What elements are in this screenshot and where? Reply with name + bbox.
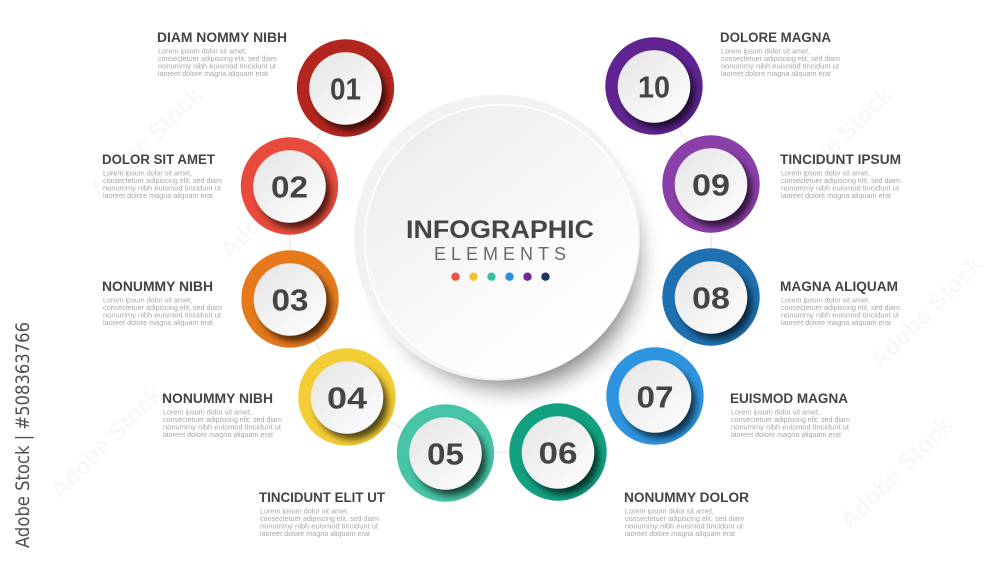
- label 05: nonummy nibh euismod tincidunt ut: [260, 522, 378, 530]
- label 01: DIAM NOMMY NIBH: [157, 30, 287, 45]
- label 03: Lorem ipsum dolor sit amet,: [103, 296, 192, 304]
- label 07: nonummy nibh euismod tincidunt ut: [731, 422, 849, 432]
- label 04: Lorem ipsum dolor sit amet,: [163, 408, 252, 416]
- label 04: laoreet dolore magna aliquam erat: [163, 430, 273, 439]
- label 07: [730, 391, 850, 439]
- label 02: nonummy nibh euismod tincidunt ut: [103, 184, 221, 192]
- label 07: Lorem ipsum dolor sit amet,: [731, 408, 820, 416]
- label 06: consectetuer adipiscing elit, sed diam: [625, 514, 744, 523]
- watermark: Adobe Stock: [85, 81, 208, 204]
- label 02: consectetuer adipiscing elit, sed diam: [103, 176, 222, 185]
- step 08: [662, 248, 760, 346]
- label 08: Lorem ipsum dolor sit amet,: [781, 296, 870, 304]
- label 04: [162, 391, 282, 439]
- label 03: nonummy nibh euismod tincidunt ut: [103, 310, 221, 320]
- connector lines: [290, 86, 711, 453]
- label 09: laoreet dolore magna aliquam erat: [781, 191, 891, 200]
- step 07: 07: [636, 380, 674, 414]
- step 02: 02: [271, 170, 308, 204]
- label 09: [780, 152, 901, 200]
- heading: infographic: INFOGRAPHIC: [406, 216, 594, 244]
- central disc: [354, 94, 640, 387]
- watermark: [45, 81, 988, 534]
- label 10: laoreet dolore magna aliquam erat: [721, 69, 831, 78]
- label 05: TINCIDUNT ELIT UT: [259, 490, 386, 505]
- colour dots: [451, 272, 550, 281]
- label 07: laoreet dolore magna aliquam erat: [731, 430, 841, 439]
- label 02: laoreet dolore magna aliquam erat: [103, 191, 213, 200]
- step 09: 09: [692, 168, 730, 202]
- label 01: laoreet dolore magna aliquam erat: [158, 69, 268, 78]
- label 01: nonummy nibh euismod tincidunt ut: [158, 62, 276, 70]
- step 02: [241, 137, 338, 235]
- step 03: [241, 250, 339, 348]
- heading: elements: ELEMENTS: [434, 244, 566, 264]
- watermark: Adobe Stock: [865, 251, 988, 374]
- step 04: 04: [327, 380, 368, 416]
- label 05: [259, 490, 386, 538]
- label 02: [102, 152, 222, 200]
- label 10: DOLORE MAGNA: [720, 30, 831, 45]
- label 02: Lorem ipsum dolor sit amet,: [103, 168, 192, 178]
- label 10: [720, 30, 840, 78]
- label 07: EUISMOD MAGNA: [730, 391, 848, 406]
- label 03: laoreet dolore magna aliquam erat: [103, 318, 213, 327]
- label 08: MAGNA ALIQUAM: [780, 279, 898, 294]
- label 08: consectetuer adipiscing elit, sed diam: [781, 303, 900, 312]
- step 05: [397, 404, 494, 502]
- label 04: nonummy nibh euismod tincidunt ut: [163, 422, 281, 432]
- label 03: NONUMMY NIBH: [102, 279, 213, 294]
- label 09: TINCIDUNT IPSUM: [780, 152, 901, 167]
- label 03: [102, 279, 222, 327]
- label 06: [624, 490, 749, 538]
- step 07: [606, 347, 704, 445]
- label 03: consectetuer adipiscing elit, sed diam: [103, 303, 222, 312]
- label 02: DOLOR SIT AMET: [102, 152, 216, 167]
- step 01: 01: [330, 72, 361, 106]
- step 10: 10: [638, 70, 670, 104]
- step 05: 05: [427, 436, 464, 472]
- step 01: [297, 39, 394, 137]
- label 06: nonummy nibh euismod tincidunt ut: [625, 522, 743, 530]
- label 05: Lorem ipsum dolor sit amet,: [260, 506, 349, 516]
- label 01: Lorem ipsum dolor sit amet,: [158, 46, 247, 56]
- step 09: [662, 135, 760, 233]
- label 04: NONUMMY NIBH: [162, 391, 273, 406]
- label 09: consectetuer adipiscing elit, sed diam: [781, 176, 900, 185]
- step 10: [605, 37, 703, 135]
- label 07: consectetuer adipiscing elit, sed diam: [731, 415, 850, 424]
- label 06: laoreet dolore magna aliquam erat: [625, 529, 735, 538]
- label 05: consectetuer adipiscing elit, sed diam: [260, 514, 379, 523]
- label 06: NONUMMY DOLOR: [624, 490, 749, 505]
- step 03: 03: [272, 282, 308, 318]
- step 06: 06: [538, 436, 578, 470]
- watermark: Adobe Stock: [45, 381, 168, 504]
- watermark: Adobe Stock: [215, 141, 338, 264]
- label 10: Lorem ipsum dolor sit amet,: [721, 46, 810, 56]
- label 08: [780, 279, 900, 327]
- watermark: Adobe Stock: [775, 81, 898, 204]
- label 10: nonummy nibh euismod tincidunt ut: [721, 62, 839, 70]
- label 01: consectetuer adipiscing elit, sed diam: [158, 54, 277, 63]
- step 08: 08: [692, 280, 730, 316]
- label 09: Lorem ipsum dolor sit amet,: [781, 168, 870, 178]
- label 08: laoreet dolore magna aliquam erat: [781, 318, 891, 327]
- label 01: [157, 30, 287, 78]
- label 06: Lorem ipsum dolor sit amet,: [625, 506, 714, 516]
- stock id caption: Adobe Stock | #508363766: [12, 322, 34, 548]
- label 10: consectetuer adipiscing elit, sed diam: [721, 54, 840, 63]
- step 04: [298, 348, 396, 446]
- watermark: Adobe Stock: [835, 411, 958, 534]
- label 08: nonummy nibh euismod tincidunt ut: [781, 310, 899, 320]
- label 05: laoreet dolore magna aliquam erat: [260, 529, 370, 538]
- label 04: consectetuer adipiscing elit, sed diam: [163, 415, 282, 424]
- step 06: [509, 403, 607, 501]
- label 09: nonummy nibh euismod tincidunt ut: [781, 184, 899, 192]
